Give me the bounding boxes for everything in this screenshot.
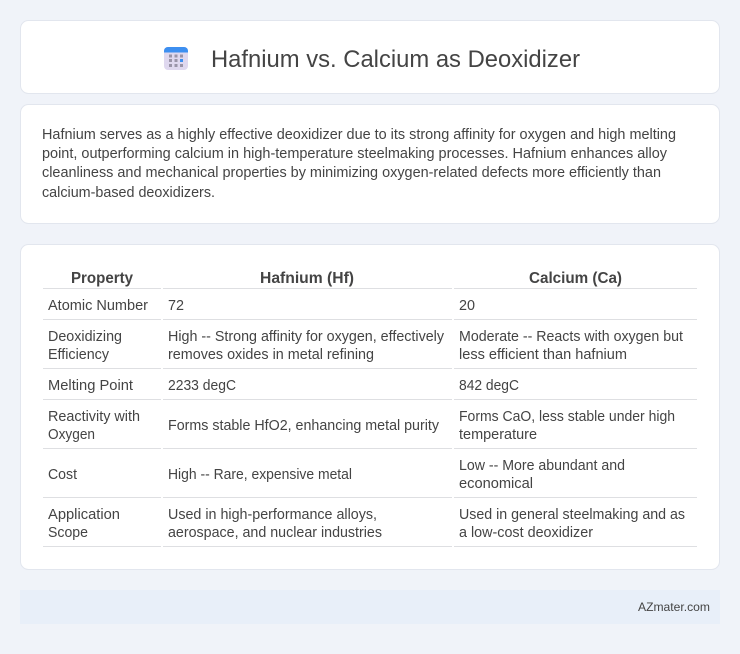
intro paragraph: cleanliness and mechanical properties by minimizing oxygen-related defects more efficiently than <box>42 165 661 181</box>
row: application scope: Used in general steelmaking and as <box>459 507 685 523</box>
row: cost: Low -- More abundant and <box>459 458 625 474</box>
row: application scope: Application <box>48 507 120 523</box>
row: deoxidizing efficiency: Deoxidizing <box>48 329 122 345</box>
row: reactivity with oxygen: Forms CaO, less stable under high <box>459 409 675 425</box>
title: Hafnium vs. Calcium as Deoxidizer <box>211 46 580 73</box>
row: melting point: 842 degC <box>459 378 519 394</box>
footer bar <box>20 590 720 624</box>
row: atomic number: 20 <box>459 298 475 314</box>
row: application scope: aerospace, and nuclear industries <box>168 525 382 541</box>
row: atomic number: 72 <box>168 298 184 314</box>
row: reactivity with oxygen: Oxygen <box>48 427 95 443</box>
row: deoxidizing efficiency: removes oxides in metal refining <box>168 347 374 363</box>
footer credit: AZmater.com <box>638 600 710 614</box>
row: melting point <box>48 378 519 394</box>
intro paragraph: Hafnium serves as a highly effective deoxidizer due to its strong affinity for oxygen and high melting <box>42 127 676 143</box>
table header row: Hafnium (Hf) <box>260 270 354 287</box>
row: deoxidizing efficiency: Moderate -- Reacts with oxygen but <box>459 329 683 345</box>
row: deoxidizing efficiency <box>48 329 683 363</box>
table header row <box>71 270 622 287</box>
intro paragraph <box>42 127 676 201</box>
row: application scope: a low-cost deoxidizer <box>459 525 593 541</box>
icon: calendar <box>164 47 188 70</box>
row: deoxidizing efficiency: High -- Strong affinity for oxygen, effectively <box>168 329 445 345</box>
row: deoxidizing efficiency: less efficient than hafnium <box>459 347 627 363</box>
row: atomic number: Atomic Number <box>48 298 148 314</box>
intro paragraph: calcium-based deoxidizers. <box>42 185 215 201</box>
table header row: Property <box>71 270 133 287</box>
row: reactivity with oxygen: Forms stable HfO2, enhancing metal purity <box>168 418 440 434</box>
table header row: Calcium (Ca) <box>529 270 622 287</box>
row: atomic number <box>48 298 475 314</box>
row: melting point: 2233 degC <box>168 378 236 394</box>
header panel <box>20 20 720 94</box>
row: application scope: Used in high-performance alloys, <box>168 507 377 523</box>
row: deoxidizing efficiency: Efficiency <box>48 347 110 363</box>
row: cost <box>48 458 625 492</box>
panel: comparison table <box>20 244 720 570</box>
row: application scope: Scope <box>48 525 88 541</box>
row: cost: Cost <box>48 467 77 483</box>
intro paragraph: point, outperforming calcium in high-temperature steelmaking processes. Hafnium enhances alloy <box>42 146 668 162</box>
row: reactivity with oxygen: Reactivity with <box>48 409 140 425</box>
row: reactivity with oxygen <box>48 409 675 443</box>
row: cost: economical <box>459 476 533 492</box>
row: application scope <box>48 507 685 541</box>
panel: intro text <box>20 104 720 224</box>
row: reactivity with oxygen: temperature <box>459 427 537 443</box>
row: melting point: Melting Point <box>48 378 133 394</box>
row: cost: High -- Rare, expensive metal <box>168 467 352 483</box>
